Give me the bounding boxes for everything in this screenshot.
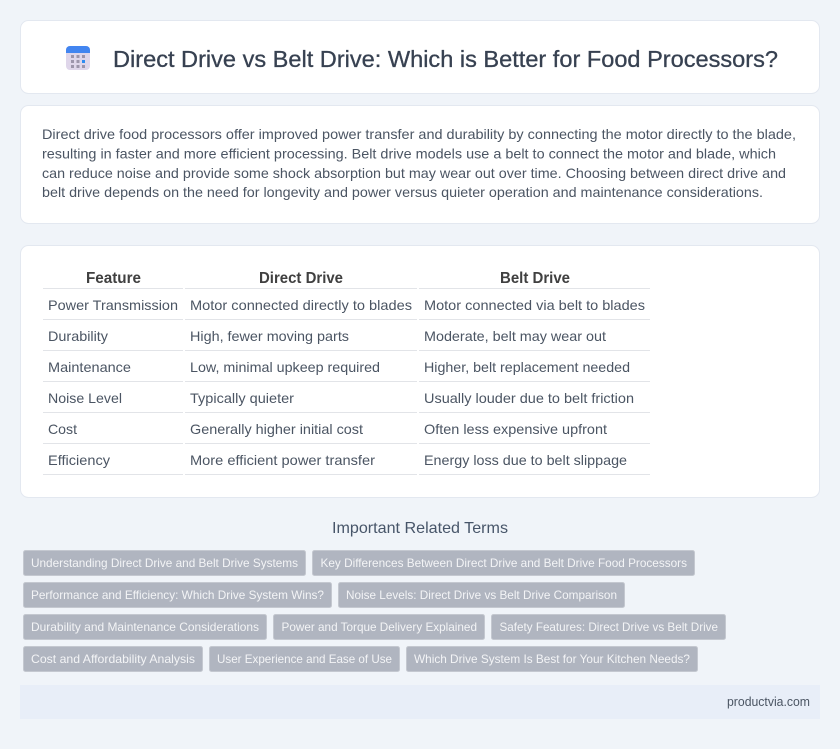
- footer source: productvia.com: [727, 694, 810, 709]
- tag: [274, 614, 484, 640]
- row: power transmission: Motor connected directly to blades: [190, 297, 412, 313]
- row: maintenance: Maintenance: [48, 359, 131, 375]
- row: efficiency: [48, 452, 627, 468]
- tag: [24, 550, 306, 576]
- tag: Understanding Direct Drive and Belt Drive Systems: [31, 556, 298, 570]
- tag: Power and Torque Delivery Explained: [282, 620, 477, 634]
- row: power transmission: [48, 297, 645, 313]
- table header: Feature: [86, 270, 141, 287]
- tag: User Experience and Ease of Use: [217, 652, 392, 666]
- title: Direct Drive vs Belt Drive: Which is Better for Food Processors?: [113, 46, 778, 72]
- row: durability: Durability: [48, 328, 108, 344]
- panel: introduction: [20, 106, 820, 224]
- heading: related terms: Important Related Terms: [332, 520, 508, 537]
- row: cost: Often less expensive upfront: [424, 421, 607, 437]
- tag: Which Drive System Is Best for Your Kitchen Needs?: [414, 652, 690, 666]
- row: efficiency: Efficiency: [48, 452, 110, 468]
- row: noise level: [48, 390, 634, 406]
- intro text: belt drive depends on the need for longevity and power versus quieter operation and maintenance considerations.: [42, 184, 763, 200]
- header panel: [20, 20, 820, 94]
- tag: [210, 646, 400, 672]
- row: efficiency: More efficient power transfer: [190, 452, 375, 468]
- table header: [86, 270, 570, 287]
- row: maintenance: Low, minimal upkeep required: [190, 359, 380, 375]
- row: efficiency: Energy loss due to belt slippage: [424, 452, 627, 468]
- icon: calendar grid: [66, 46, 90, 70]
- footer bar: [20, 685, 820, 719]
- tag: [24, 582, 332, 608]
- row: power transmission: Power Transmission: [48, 297, 178, 313]
- tag: [406, 646, 698, 672]
- row: cost: Generally higher initial cost: [190, 421, 363, 437]
- tag: [338, 582, 624, 608]
- tag: Noise Levels: Direct Drive vs Belt Drive Comparison: [346, 588, 617, 602]
- tag: [312, 550, 694, 576]
- related term tags: [24, 550, 726, 672]
- row: power transmission: Motor connected via belt to blades: [424, 297, 645, 313]
- intro text: Direct drive food processors offer improved power transfer and durability by connecting the motor directly to the blade,: [42, 126, 796, 142]
- row: durability: [48, 328, 606, 344]
- tag: [492, 614, 726, 640]
- row: maintenance: [48, 359, 630, 375]
- row: noise level: Typically quieter: [190, 390, 294, 406]
- panel: comparison table: [20, 246, 820, 498]
- tag: Durability and Maintenance Considerations: [31, 620, 259, 634]
- tag: Key Differences Between Direct Drive and Belt Drive Food Processors: [320, 556, 687, 570]
- row: maintenance: Higher, belt replacement needed: [424, 359, 630, 375]
- intro text: resulting in faster and more efficient processing. Belt drive models use a belt to connect the motor and blade, which: [42, 146, 776, 162]
- row: noise level: Noise Level: [48, 390, 122, 406]
- row: durability: Moderate, belt may wear out: [424, 328, 606, 344]
- row: cost: [48, 421, 607, 437]
- intro text: can reduce noise and provide some shock absorption but may wear out over time. Choosing between direct drive and: [42, 165, 786, 181]
- intro text: [42, 126, 796, 200]
- tag: Cost and Affordability Analysis: [31, 652, 195, 666]
- table header: Direct Drive: [259, 270, 343, 287]
- row: noise level: Usually louder due to belt friction: [424, 390, 634, 406]
- tag: Performance and Efficiency: Which Drive System Wins?: [31, 588, 324, 602]
- tag: Safety Features: Direct Drive vs Belt Drive: [500, 620, 718, 634]
- tag: [24, 614, 266, 640]
- row: cost: Cost: [48, 421, 77, 437]
- table header: Belt Drive: [500, 270, 570, 287]
- tag: [24, 646, 202, 672]
- row: durability: High, fewer moving parts: [190, 328, 349, 344]
